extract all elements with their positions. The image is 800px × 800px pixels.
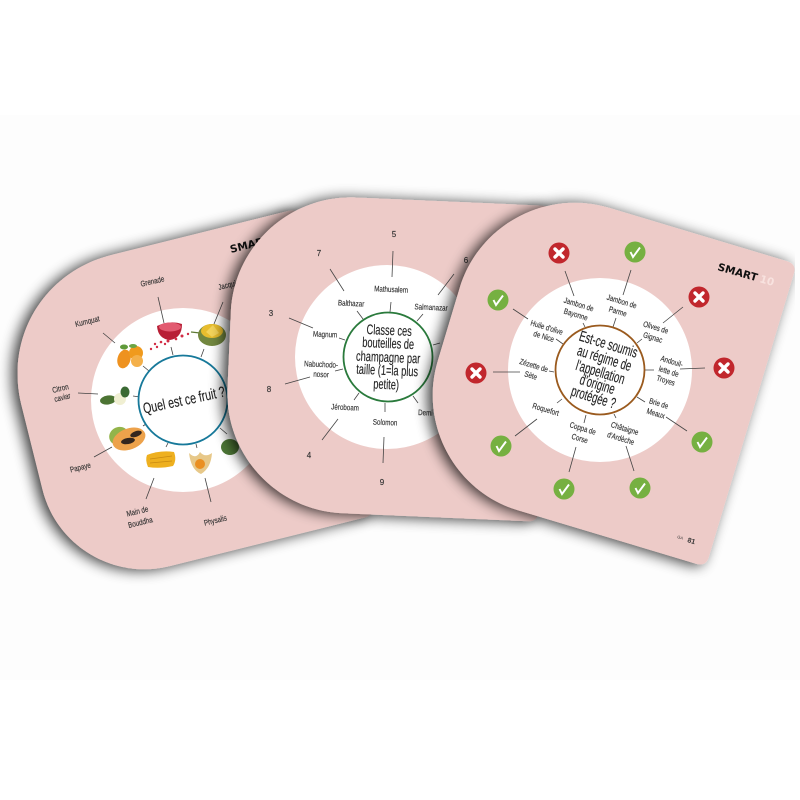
- right card food labels: d'Ardèche: [606, 431, 635, 447]
- right card food labels: lette de: [658, 365, 680, 379]
- middle card white disk: [295, 265, 479, 449]
- middle card question circle: taille (1=la plus: [356, 361, 419, 380]
- right card question circle: Est-ce soumis: [577, 328, 640, 361]
- icon: kumquat: [115, 344, 143, 370]
- icon: check Jambon de Parme: [624, 242, 646, 262]
- icon: pomegranate: [150, 322, 189, 350]
- panel: middle card, champagne question: [222, 192, 552, 522]
- left card logo: SMART: [229, 234, 272, 256]
- left card spokes: [78, 297, 227, 502]
- left card fruit labels: Physalis: [203, 514, 228, 528]
- left card fruit labels: Citron: [51, 382, 70, 395]
- right card page number: 81: [686, 537, 696, 546]
- right card question circle: protégée ?: [569, 383, 618, 412]
- icon: cross Olives de Gignac: [688, 286, 710, 308]
- right card question circle: d'origine: [578, 371, 617, 398]
- icon: check Huile d'olive de Nice: [488, 290, 508, 310]
- middle card question circle: bouteilles de: [362, 334, 415, 353]
- icon: green fruit partly hidden: [221, 439, 239, 455]
- icon: physalis: [189, 452, 212, 474]
- middle card order numbers: 9: [380, 478, 385, 487]
- right card logo: 10: [758, 273, 776, 289]
- right card food labels: Châtaigne: [610, 420, 640, 437]
- icon: cross Jambon de Bayonne: [548, 242, 570, 264]
- middle card background: [222, 192, 552, 522]
- middle card order numbers: 4: [307, 451, 312, 460]
- panel: left card, fruit question: [0, 208, 375, 592]
- right card page number: [677, 534, 696, 546]
- left card background: [0, 208, 375, 592]
- right card food labels: Zézette de: [518, 357, 549, 374]
- middle card bottle labels: Solomon: [373, 418, 398, 428]
- right card question circle: au régime de: [575, 342, 634, 375]
- right card logo: [716, 261, 776, 289]
- right card food labels: Andouil-: [659, 354, 684, 370]
- middle card question circle: [344, 312, 432, 402]
- middle card bottle labels: Balthazar: [338, 299, 365, 309]
- middle card question circle: champagne par: [356, 348, 421, 367]
- right card question circle: l'appellation: [574, 357, 627, 388]
- middle card order numbers: 5: [392, 230, 397, 239]
- icon: check Châtaigne d'Ardèche: [630, 478, 650, 498]
- middle card order numbers: 6: [464, 256, 469, 265]
- middle card spokes: [285, 251, 454, 463]
- middle card bottle labels: Jéroboam: [331, 403, 359, 413]
- right card food labels: Roquefort: [531, 402, 560, 418]
- right card question circle: [556, 326, 644, 414]
- icon: finger lime: [99, 386, 130, 406]
- icon: jackfruit: [191, 324, 226, 346]
- right card spokes: [493, 270, 705, 472]
- left card fruit labels: Bouddha: [127, 515, 154, 530]
- right card food labels: Huile d'olive: [529, 319, 564, 337]
- middle card bottle labels: Salmanazar: [414, 303, 448, 313]
- middle card bottle labels: [304, 285, 448, 428]
- icon: cross Andouillette de Troyes: [714, 358, 734, 378]
- icon: check Coppa de Corse: [554, 478, 574, 500]
- left card fruit labels: Papaye: [69, 461, 92, 475]
- middle card bottle labels: Demi: [418, 408, 433, 418]
- left card fruit labels: Grenade: [140, 275, 165, 289]
- right card food labels: Corse: [570, 432, 589, 446]
- left card fruit labels: Jacquier: [217, 278, 243, 292]
- right card page number: GA: [677, 534, 684, 541]
- middle card question circle: petite): [373, 375, 399, 393]
- middle card bottle labels: nosor: [313, 370, 330, 380]
- right card white disk: [508, 278, 692, 462]
- icon: Buddha's hand: [146, 451, 175, 468]
- panel: right card, protected origin question: [403, 173, 797, 567]
- right card food labels: Parme: [608, 305, 628, 319]
- right card food labels: Troyes: [655, 374, 676, 388]
- right card food labels: Brie de: [648, 397, 669, 411]
- middle card bottle labels: Mathusalem: [374, 285, 408, 295]
- right card logo: SMART: [716, 261, 760, 284]
- left card question circle: [138, 356, 228, 444]
- right card food labels: de Nice: [532, 330, 555, 344]
- icon: check Brie de Meaux: [692, 432, 712, 452]
- right card food labels: Sète: [523, 370, 538, 382]
- right card background: [403, 173, 797, 567]
- left card white disk: [91, 308, 275, 492]
- icon: papaya: [106, 423, 149, 455]
- right card food labels: [518, 293, 684, 447]
- left card fruit labels: [51, 275, 243, 530]
- middle card order numbers: 3: [269, 309, 274, 318]
- right card food labels: Jambon de: [563, 296, 595, 314]
- right card food labels: Meaux: [645, 407, 666, 421]
- right card food labels: Bayonne: [563, 307, 589, 323]
- middle card bottle labels: Magnum: [313, 330, 337, 340]
- right card food labels: Olives de: [642, 320, 669, 336]
- right card answer icons: [466, 242, 734, 500]
- right card food labels: Gignac: [642, 331, 664, 345]
- middle card order numbers: 8: [267, 385, 272, 394]
- left card question circle: Quel est ce fruit ?: [141, 383, 227, 417]
- left card fruit labels: Kumquat: [74, 314, 101, 329]
- middle card order numbers: 7: [317, 249, 322, 258]
- middle card question circle: Classe ces: [366, 321, 412, 340]
- icon: check Roquefort: [490, 436, 512, 456]
- left card fruit labels: caviar: [53, 391, 72, 404]
- right card food labels: Jambon de: [606, 293, 638, 311]
- right card food labels: Coppa de: [568, 421, 597, 437]
- icon: cross Zézette de Sète: [466, 362, 486, 384]
- left card fruit labels: Main de: [126, 505, 149, 519]
- middle card order numbers: [267, 230, 469, 487]
- middle card bottle labels: Nabuchodo-: [304, 360, 339, 370]
